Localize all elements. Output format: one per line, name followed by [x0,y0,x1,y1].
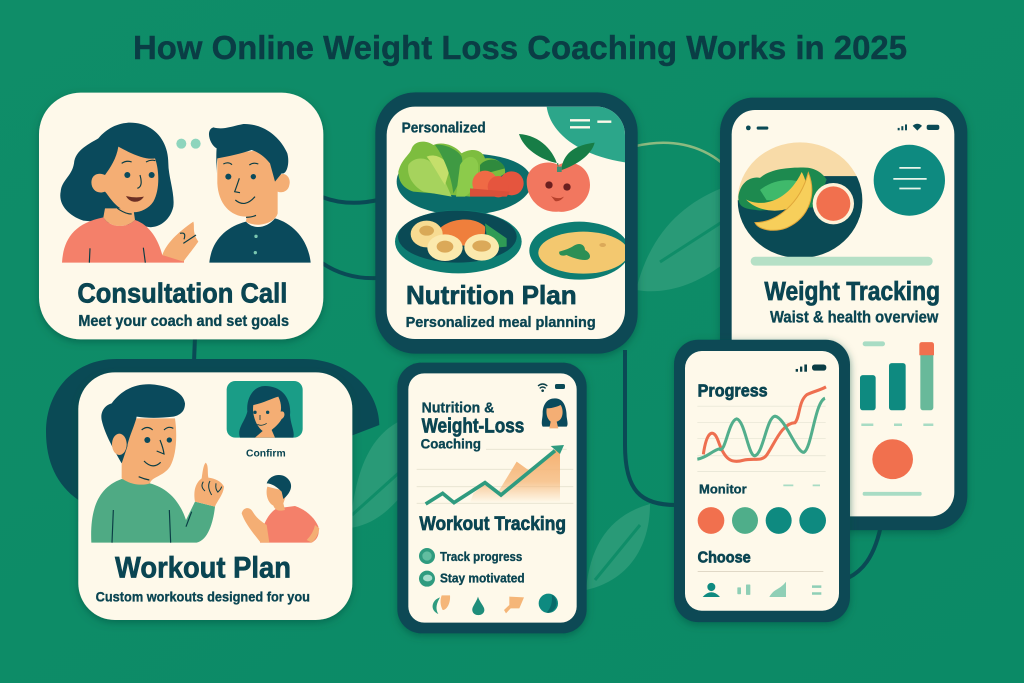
nav icons [703,582,821,597]
panel: progress phone [674,340,850,622]
apple [519,134,595,212]
phone frame [375,92,638,354]
woman figure [60,123,198,263]
connector lines [194,143,882,578]
bottom icons [433,594,558,615]
video thumbnail [227,381,303,438]
speech dots [176,139,201,149]
choose label: Choose [698,549,751,567]
progress bar [751,257,933,266]
trend chart [417,445,573,504]
description: Meet your coach and set goals [78,313,289,330]
checklist: Stay motivated [440,571,525,585]
panel: weight tracking phone [720,98,967,530]
line chart [697,387,826,472]
title: How Online Weight Loss Coaching Works in 2025 [133,29,907,66]
status icons [796,364,826,372]
card background [39,93,323,339]
heading: Progress [698,381,768,401]
phone frame [397,363,587,633]
phone frame [720,98,967,530]
dark backing shape [46,359,379,522]
bar chart [860,341,934,425]
screen [685,351,839,611]
status icons [538,384,565,392]
heading: Workout Plan [115,552,291,585]
man figure [209,124,311,263]
app title: Weight-Loss [422,416,524,438]
soup bowl [529,222,629,280]
coach figure [91,384,224,543]
corner badge [547,107,625,162]
description: Personalized meal planning [406,315,596,331]
status bar [746,124,939,131]
salad bowl [397,142,532,215]
app title [421,401,524,451]
app title: Nutrition & [422,401,495,417]
description: Waist & health overview [770,308,939,327]
menu circle [874,145,945,216]
screen [408,373,577,623]
monitor label: Monitor [699,481,747,497]
small figure [242,475,319,543]
app title: Coaching [421,435,481,451]
background leaves [350,188,722,590]
confirm label: Confirm [246,449,286,460]
checklist: Track progress [440,550,522,564]
status dots [698,507,826,534]
heading: Nutrition Plan [406,280,577,310]
bottom line [863,492,922,496]
description: Custom workouts designed for you [96,589,310,605]
label: Personalized [402,121,486,137]
panel: nutrition plan [375,92,638,354]
heading: Workout Tracking [419,514,566,535]
screen [387,107,625,339]
heading: Weight Tracking [764,278,940,306]
heading: Consultation Call [77,278,287,309]
screen [732,110,954,516]
panel: consultation call [39,93,323,339]
coral circle [872,439,913,479]
panel: workout tracking phone [397,363,587,633]
avatar [542,398,568,428]
plate with eggs [395,210,522,273]
card background [78,372,352,620]
phone frame [674,340,850,622]
panel: workout plan [46,359,379,620]
meal bowl illustration [738,142,863,259]
checklist [419,548,525,587]
